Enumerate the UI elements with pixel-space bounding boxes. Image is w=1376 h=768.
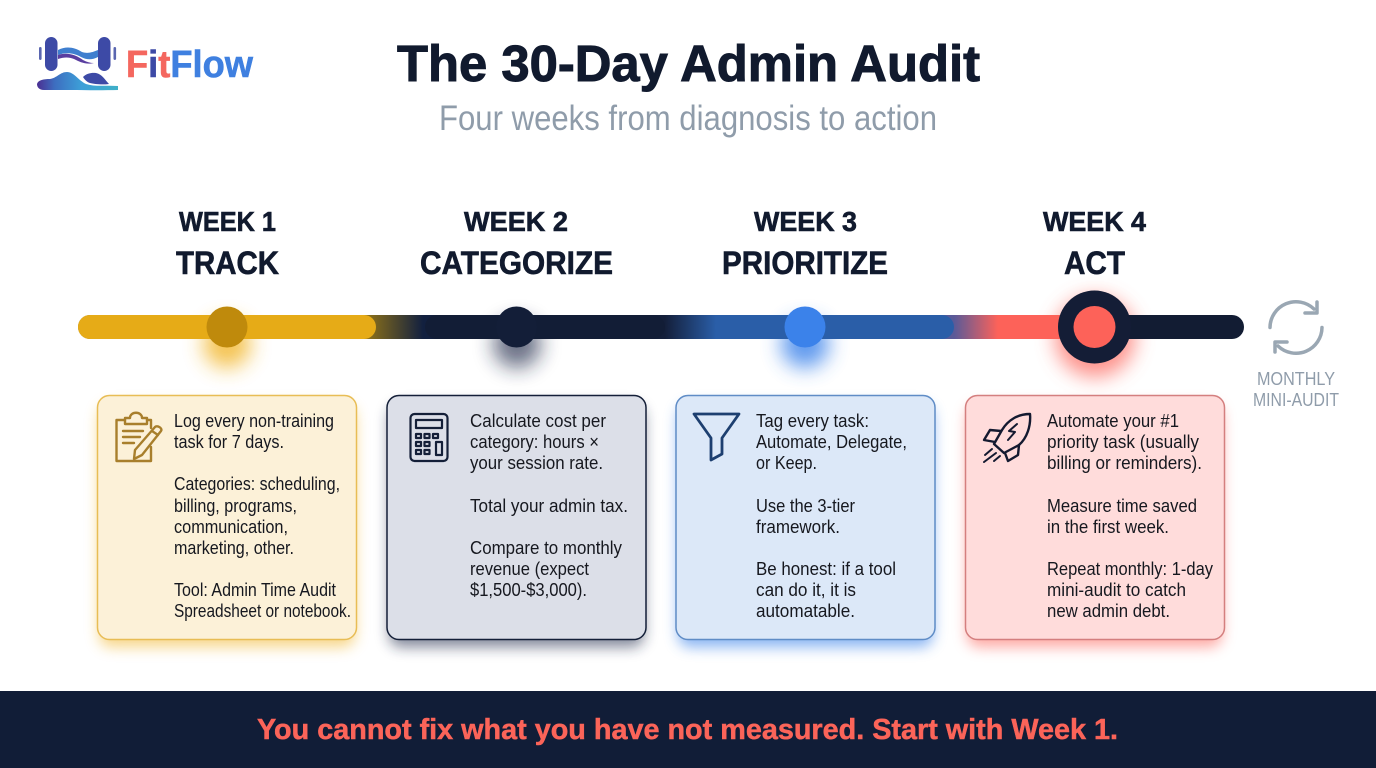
- panel: week 2 categorize: category: hours ×: [470, 431, 599, 452]
- panel: week 4 act: Repeat monthly: 1-day: [1047, 558, 1214, 579]
- node: week 3: [784, 306, 826, 348]
- week 3 heading: [722, 206, 888, 281]
- week 3 heading: WEEK 3: [754, 206, 857, 237]
- week 4 heading: ACT: [1064, 245, 1125, 281]
- panel: week 2 categorize: $1,500-$3,000).: [470, 579, 587, 600]
- panel: week 3 prioritize: automatable.: [756, 600, 855, 621]
- label: monthly mini-audit: MONTHLY: [1257, 368, 1335, 389]
- panel: week 4 act: Automate your #1: [1047, 410, 1179, 431]
- title: The 30-Day Admin Audit: [397, 35, 980, 92]
- week 3 heading: PRIORITIZE: [722, 245, 888, 281]
- week 1 heading: WEEK 1: [179, 206, 276, 237]
- week 1 heading: [176, 206, 279, 281]
- week 1 heading: TRACK: [176, 245, 279, 281]
- panel: week 3 prioritize: or Keep.: [756, 452, 817, 473]
- panel: week 4 act: in the first week.: [1047, 516, 1169, 537]
- subtitle: Four weeks from diagnosis to action: [439, 99, 937, 138]
- panel: week 4 act: mini-audit to catch: [1047, 579, 1186, 600]
- panel: week 1 track: task for 7 days.: [174, 431, 284, 452]
- panel: week 1 track: communication,: [174, 516, 288, 537]
- panel: week 4 act: new admin debt.: [1047, 600, 1170, 621]
- label: monthly mini-audit: [1253, 368, 1339, 410]
- panel: week 2 categorize: Total your admin tax.: [470, 495, 628, 516]
- week 2 heading: [420, 206, 613, 281]
- panel: week 4 act: [966, 396, 1224, 647]
- panel: week 1 track: Spreadsheet or notebook.: [174, 600, 351, 621]
- icon: funnel: [694, 414, 739, 460]
- panel: week 4 act: Measure time saved: [1047, 495, 1197, 516]
- panel: week 2 categorize: revenue (expect: [470, 558, 589, 579]
- panel: week 2 categorize: Compare to monthly: [470, 537, 623, 558]
- week 4 heading: [1043, 206, 1147, 281]
- panel: week 3 prioritize: Be honest: if a tool: [756, 558, 896, 579]
- logo wordmark: FitFlow: [126, 44, 253, 86]
- panel: week 3 prioritize: can do it, it is: [756, 579, 856, 600]
- panel: week 1 track: marketing, other.: [174, 537, 294, 558]
- panel: week 3 prioritize: [676, 396, 935, 647]
- footer banner: [0, 691, 1376, 768]
- icon: rocket: [984, 414, 1030, 462]
- label: monthly mini-audit: MINI-AUDIT: [1253, 389, 1339, 410]
- panel: week 3 prioritize: Tag every task:: [756, 410, 869, 431]
- node: week 2: [496, 306, 537, 348]
- week 4 heading: WEEK 4: [1043, 206, 1147, 237]
- panel: week 1 track: [98, 396, 356, 647]
- footer callout text: You cannot fix what you have not measured. Start with Week 1.: [257, 714, 1118, 746]
- node: week 4: [1058, 290, 1131, 364]
- panel: week 4 act: billing or reminders).: [1047, 452, 1202, 473]
- panel: week 3 prioritize: framework.: [756, 516, 840, 537]
- node: week 1: [206, 306, 248, 348]
- icon: dumbbell and wave: [37, 37, 118, 90]
- panel: week 1 track: billing, programs,: [174, 495, 297, 516]
- panel: week 3 prioritize: Use the 3-tier: [756, 495, 855, 516]
- panel: week 2 categorize: your session rate.: [470, 452, 603, 473]
- logo: FitFlow: [37, 37, 253, 90]
- week 2 heading: CATEGORIZE: [420, 245, 613, 281]
- panel: week 2 categorize: Calculate cost per: [470, 410, 606, 431]
- panel: week 4 act: priority task (usually: [1047, 431, 1200, 452]
- icon: calculator: [410, 414, 448, 461]
- timeline bar: [78, 290, 1244, 377]
- icon: monthly repeat arrows: [1270, 302, 1322, 353]
- panel: week 1 track: Categories: scheduling,: [174, 473, 340, 494]
- panel: week 3 prioritize: Automate, Delegate,: [756, 431, 907, 452]
- panel: week 2 categorize: [387, 396, 646, 647]
- panel: week 1 track: Tool: Admin Time Audit: [174, 579, 336, 600]
- panel: week 1 track: Log every non-training: [174, 410, 334, 431]
- week 2 heading: WEEK 2: [464, 206, 568, 237]
- icon: clipboard and pencil: [116, 413, 161, 461]
